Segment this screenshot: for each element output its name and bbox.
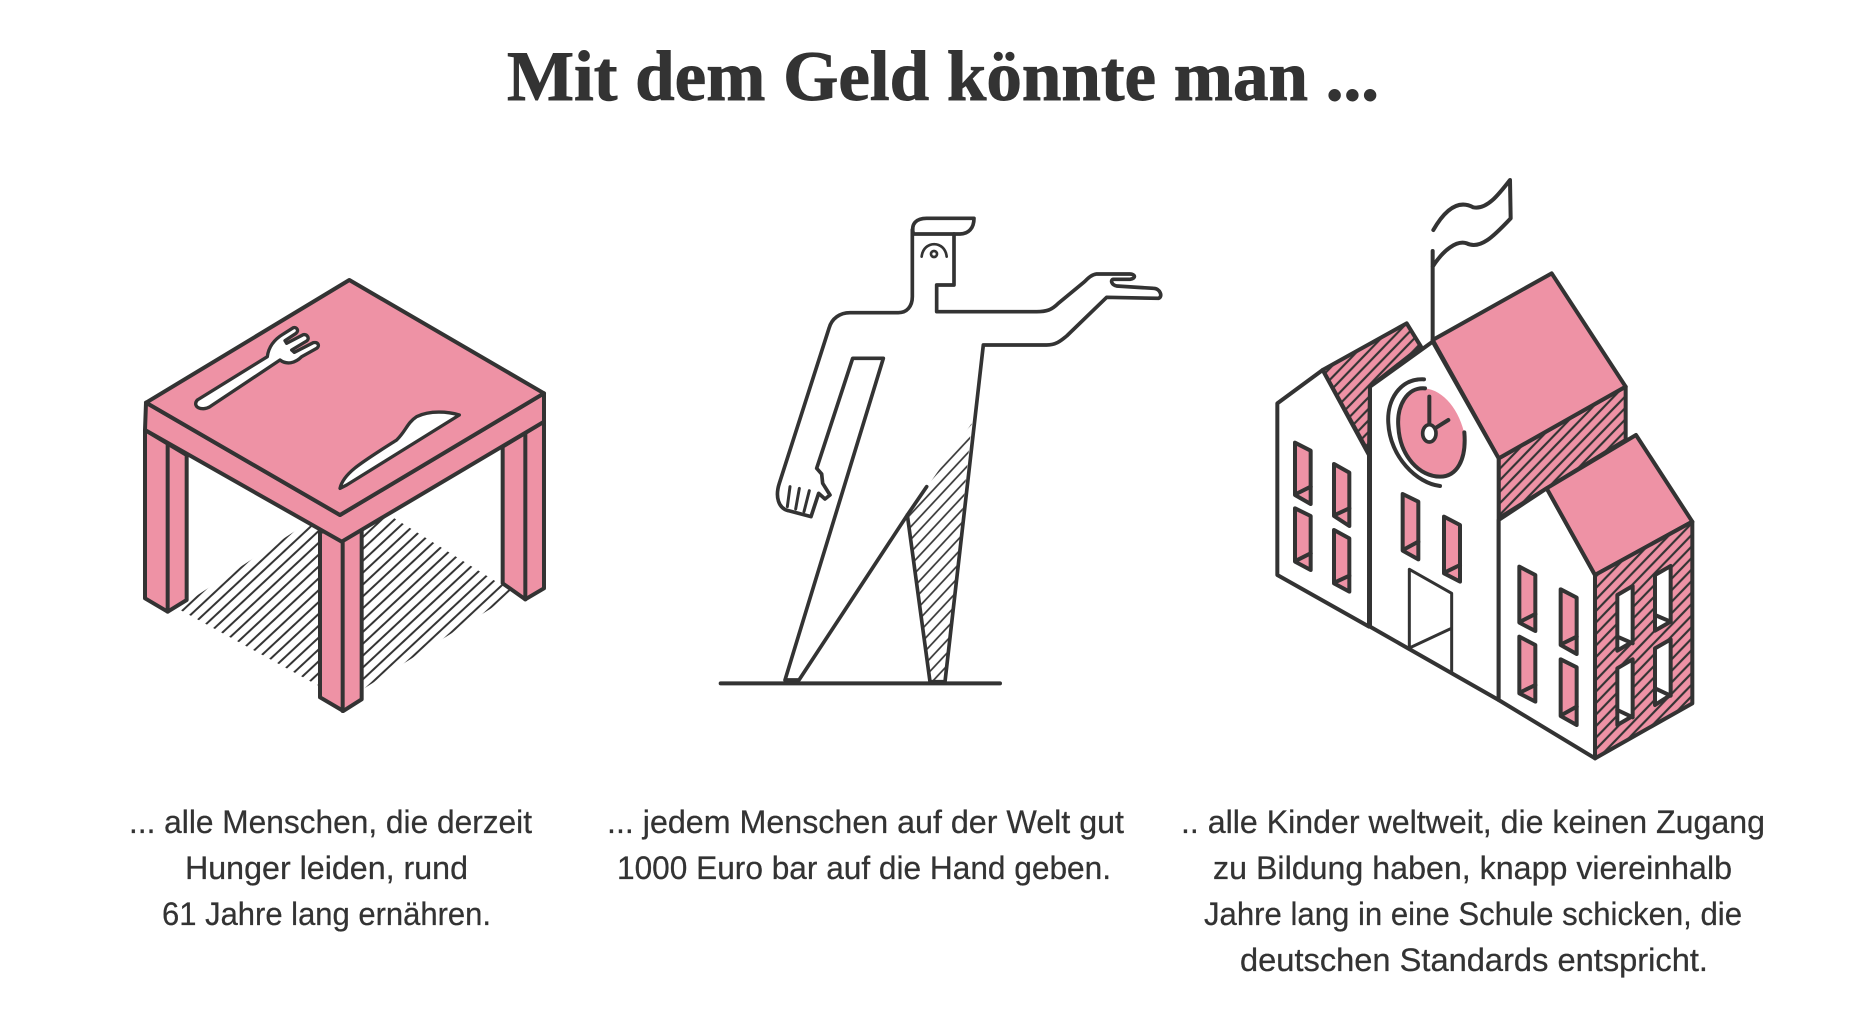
text block: school caption bbox=[1181, 804, 1765, 978]
icon: fork bbox=[196, 328, 318, 409]
right roof bbox=[1547, 435, 1692, 575]
rear hatched gable bbox=[1499, 387, 1626, 518]
side windows bbox=[1617, 566, 1671, 725]
table front leg bbox=[320, 530, 362, 711]
title: Mit dem Geld könnte man ... bbox=[507, 38, 1379, 116]
panel: table illustration bbox=[145, 280, 544, 711]
text block: school caption: Jahre lang in eine Schule schicken, die bbox=[1204, 896, 1742, 932]
hatched leg bbox=[907, 423, 972, 682]
text block: person caption: 1000 Euro bar auf die Hand geben. bbox=[617, 850, 1111, 886]
eye bbox=[922, 244, 947, 257]
left wall bbox=[1277, 370, 1369, 627]
person outline bbox=[777, 230, 1161, 682]
centre wall bbox=[1370, 342, 1499, 700]
text block: school caption: zu Bildung haben, knapp viereinhalb bbox=[1213, 850, 1732, 886]
text block: school caption: .. alle Kinder weltweit, die keinen Zugang bbox=[1181, 804, 1765, 840]
flag bbox=[1433, 180, 1511, 340]
hair bbox=[913, 218, 974, 234]
ground line bbox=[721, 677, 1000, 689]
table top bbox=[146, 280, 544, 515]
text block: school caption: deutschen Standards entspricht. bbox=[1240, 942, 1708, 978]
hatched side wall bbox=[1595, 522, 1692, 758]
text block: person caption bbox=[607, 804, 1124, 886]
panel: school illustration bbox=[1277, 180, 1692, 758]
hatched floor shadow bbox=[177, 517, 515, 690]
text block: person caption: ... jedem Menschen auf der Welt gut bbox=[607, 804, 1124, 840]
text block: table caption: ... alle Menschen, die derzeit bbox=[129, 804, 532, 840]
text block: table caption: 61 Jahre lang ernähren. bbox=[162, 896, 491, 932]
text block: table caption: Hunger leiden, rund bbox=[185, 850, 468, 886]
right wall bbox=[1499, 488, 1595, 758]
door bbox=[1409, 569, 1452, 672]
left roof bbox=[1323, 323, 1421, 453]
icon: knife bbox=[340, 412, 459, 488]
clock bbox=[1388, 379, 1465, 486]
main roof bbox=[1433, 273, 1626, 458]
table right leg bbox=[503, 422, 544, 599]
front windows bbox=[1295, 443, 1577, 725]
text block: table caption bbox=[129, 804, 532, 932]
fingers bbox=[787, 487, 809, 512]
table skirt bbox=[145, 393, 544, 542]
table left leg bbox=[145, 430, 187, 612]
panel: person illustration bbox=[721, 218, 1161, 683]
